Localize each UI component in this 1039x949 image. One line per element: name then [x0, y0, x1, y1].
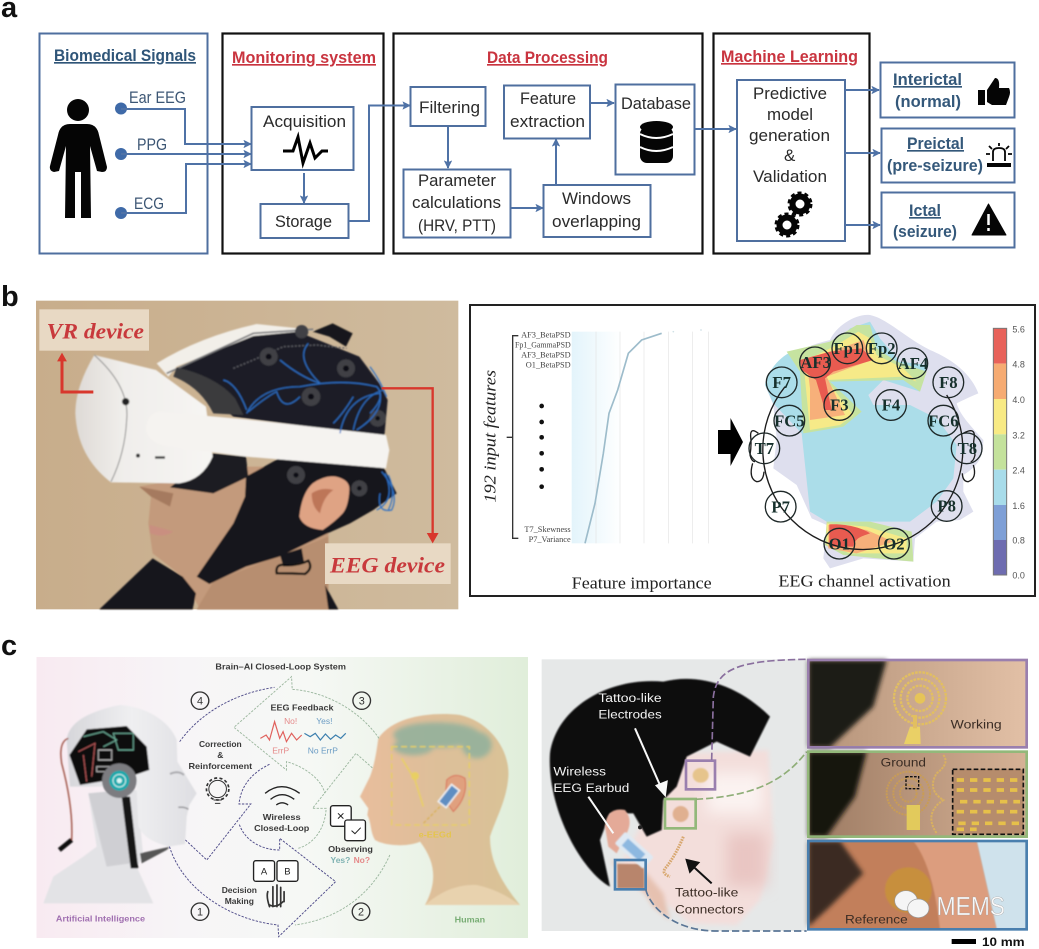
box: windows overlapping: Windows: [562, 189, 631, 208]
box: predictive model: &: [784, 146, 796, 165]
icon: warning triangle: [972, 204, 1006, 235]
color scale: 1.6: [1012, 501, 1025, 511]
output: preictal: [882, 128, 1014, 182]
label: tattoo-like connectors: Tattoo-like: [675, 886, 739, 900]
chart: feature importance: [481, 329, 712, 593]
block: EEG feedback: Yes!: [316, 716, 332, 726]
panel label c: c: [1, 630, 17, 662]
step number labels: 1: [197, 907, 203, 919]
block: observing: [328, 806, 373, 865]
panel: data processing: [394, 34, 702, 254]
feature labels: AF3_BetaPSD: [521, 350, 571, 359]
y axis title: 192 input features: [481, 370, 500, 503]
block: correction and reinforcement: [188, 739, 252, 803]
color scale: 4.8: [1012, 360, 1025, 370]
heading: monitoring system: Monitoring system: [232, 49, 376, 67]
panel: machine learning: [714, 34, 870, 254]
box: parameter calculations: (HRV, PTT): [418, 216, 496, 235]
box: storage: [260, 204, 348, 238]
icon: person: [50, 99, 107, 218]
block: EEG feedback: No!: [284, 716, 297, 726]
electrode names: F4: [882, 396, 901, 415]
marker: working electrode box: [686, 761, 715, 789]
head outline: [750, 387, 975, 549]
box: parameter calculations: calculations: [412, 193, 501, 212]
label: EEG device: [325, 543, 451, 584]
feature labels: Fp1_GammaPSD: [515, 341, 571, 350]
box: filtering: Filtering: [419, 98, 480, 117]
block: observing: No?: [354, 855, 370, 865]
arrow: black right arrow: [718, 418, 743, 466]
panel: biomedical signals: [40, 34, 208, 254]
panel frame: feature importance and EEG channel activation: [470, 305, 1035, 596]
label: tattoo-like electrodes: Electrodes: [598, 708, 662, 722]
electrode names: FC5: [774, 411, 805, 430]
panel label b: b: [1, 281, 19, 313]
scale bar: 10 mm: [982, 935, 1025, 949]
inset: ground electrode: [808, 752, 1027, 837]
dashed connectors: [646, 659, 807, 931]
step numbers: [191, 692, 371, 920]
label: artificial intelligence: Artificial Intelligence: [56, 913, 145, 923]
output: interictal: [880, 62, 1014, 118]
icon: database: [640, 121, 673, 163]
color scale: [993, 325, 1025, 580]
signal labels: ECG: [134, 194, 164, 213]
output: ictal: [882, 192, 1014, 248]
label: wireless EEG earbud: Wireless: [553, 764, 606, 778]
electrode names: F7: [772, 373, 791, 392]
box: predictive model: generation: [749, 126, 830, 145]
box: database: Database: [621, 94, 691, 113]
electrode names: Fp2: [868, 339, 896, 358]
electrode names: [755, 339, 977, 553]
electrode names: T8: [958, 439, 977, 458]
connector arrows: [121, 90, 880, 225]
color scale: 0.8: [1012, 536, 1025, 546]
heading: biomedical signals: Biomedical Signals: [54, 47, 196, 65]
icon: chat bubbles watermark: [895, 891, 929, 918]
box: predictive model: Predictive: [753, 84, 827, 103]
output: preictal: Preictal: [907, 135, 964, 153]
box: windows overlapping: overlapping: [552, 212, 641, 231]
icon: hand: [267, 885, 284, 907]
color scale: 0.0: [1012, 570, 1025, 580]
label: e-EEGd: e-EEGd: [419, 829, 452, 839]
inset: working electrode: Working: [951, 718, 1002, 732]
ellipsis dots: [539, 404, 544, 489]
electrode names: F3: [830, 396, 849, 415]
title: Brain–AI Closed-Loop System: [215, 662, 346, 672]
heading: machine learning: Machine Learning: [721, 48, 858, 66]
photo: VR and EEG headset: [36, 301, 458, 609]
label: tattoo-like connectors: [675, 886, 744, 916]
panel a: seizure prediction pipeline: [40, 34, 1014, 254]
watermark: MEMS: MEMS: [937, 891, 1005, 921]
block: decision making: B: [284, 865, 291, 876]
box: feature extraction: Feature: [520, 89, 576, 108]
feature labels: T7_Skewness: [524, 525, 571, 534]
block: EEG feedback: No ErrP: [308, 746, 338, 756]
box: database: [616, 84, 694, 174]
step number labels: [197, 696, 365, 919]
label: tattoo-like electrodes: [598, 691, 662, 722]
illustration: human head: [360, 714, 520, 905]
box: parameter calculations: Parameter: [418, 171, 496, 190]
color scale: 5.6: [1012, 325, 1025, 335]
output: preictal: (pre-seizure): [887, 157, 983, 175]
color scale: 4.0: [1012, 395, 1025, 405]
step number labels: 3: [359, 696, 365, 708]
block: EEG feedback: [260, 703, 346, 756]
electrode names: O1: [829, 534, 850, 553]
feature labels: AF3_BetaPSD: [521, 331, 571, 340]
box: storage: Storage: [275, 212, 332, 231]
box: parameter calculations: [404, 170, 510, 238]
heading: data processing: Data Processing: [487, 49, 608, 67]
box: predictive model: Validation: [753, 167, 827, 186]
block: wireless closed-loop: Wireless: [263, 812, 301, 822]
block: decision making: Making: [225, 896, 254, 906]
marker: ground electrode box: [665, 799, 696, 828]
electrode names: O2: [883, 534, 905, 553]
step number labels: 4: [197, 696, 203, 708]
electrode names: P8: [937, 497, 956, 516]
block: wireless closed-loop: [254, 787, 309, 833]
box: acquisition: [252, 107, 354, 170]
panel c left background: [36, 657, 528, 938]
photo: head with electrodes: [550, 679, 773, 925]
label: wireless EEG earbud: [553, 764, 629, 795]
block: observing: Observing: [328, 844, 373, 854]
marker: reference electrode box: [615, 860, 646, 889]
feature labels: O1_BetaPSD: [526, 361, 571, 370]
label: tattoo-like connectors: Connectors: [675, 902, 744, 916]
block: decision making: Decision: [222, 885, 257, 895]
label: VR device: VR device: [47, 318, 144, 343]
signal labels: [129, 88, 186, 213]
electrode names: F8: [939, 373, 958, 392]
label: wireless EEG earbud: EEG Earbud: [553, 781, 629, 795]
signal labels: PPG: [137, 135, 167, 154]
box: predictive model: [737, 80, 845, 241]
box: feature extraction: [504, 86, 590, 138]
chart: EEG topographic map: [749, 315, 1025, 591]
scale bar: [952, 935, 1025, 949]
inset: reference electrode: [808, 841, 1027, 929]
box: feature extraction: extraction: [510, 112, 585, 131]
panel c left: closed-loop diagram: [56, 662, 485, 937]
block: correction and reinforcement: &: [217, 750, 223, 760]
output: ictal: (seizure): [893, 223, 957, 241]
signal labels: Ear EEG: [129, 88, 186, 107]
feature labels: P7_Variance: [529, 535, 571, 544]
electrode names: FC6: [928, 411, 959, 430]
block: correction and reinforcement: Reinforcement: [188, 761, 252, 771]
electrode names: AF4: [898, 354, 929, 373]
block: wireless closed-loop: Closed-Loop: [254, 823, 309, 833]
arrow: to EEG device label: [382, 388, 438, 543]
block: decision making: A: [261, 865, 268, 876]
panel c right: wireless EEG earbud photo and insets: [542, 659, 1027, 949]
electrode names: P7: [771, 497, 790, 516]
electrode names: T7: [755, 439, 774, 458]
label: EEG device: EEG device: [329, 553, 445, 578]
block: correction and reinforcement: Correction: [199, 739, 242, 749]
output: interictal: (normal): [895, 93, 961, 111]
illustration: robot head: [43, 705, 197, 903]
block: decision making: [222, 861, 298, 907]
label: VR device: [39, 309, 149, 351]
icon: gear lightbulb: [206, 778, 229, 803]
output: ictal: Ictal: [909, 202, 941, 220]
icon: thumbs up: [978, 78, 1010, 105]
box: windows overlapping: [544, 185, 650, 237]
output: interictal: Interictal: [893, 71, 962, 89]
panel: monitoring system: [222, 34, 384, 254]
x axis title: Feature importance: [572, 574, 712, 593]
icon: alarm light: [986, 143, 1012, 165]
block: EEG feedback: ErrP: [272, 746, 290, 756]
sensor dots: [115, 102, 127, 219]
label: tattoo-like electrodes: Tattoo-like: [598, 691, 662, 705]
icon: gears: [776, 193, 811, 236]
step number labels: 2: [358, 907, 364, 919]
box: filtering: [410, 87, 486, 126]
chart title: EEG channel activation: [778, 572, 951, 591]
label: human: Human: [455, 915, 485, 925]
box: acquisition: Acquisition: [263, 112, 346, 131]
arrows: callouts: [588, 728, 712, 883]
color scale: 2.4: [1012, 465, 1025, 475]
electrode names: AF3: [800, 353, 831, 372]
arrow: to VR device label: [58, 353, 93, 392]
box: predictive model: model: [767, 105, 813, 124]
feature labels: [515, 331, 571, 544]
electrode circles: [749, 333, 982, 559]
closed-loop dashed arrows: [170, 677, 390, 937]
inset: ground electrode: Ground: [881, 756, 926, 770]
inset: reference electrode: Reference: [845, 912, 908, 926]
color scale: 3.2: [1012, 430, 1025, 440]
electrode names: Fp1: [833, 339, 861, 358]
block: EEG feedback: EEG Feedback: [271, 703, 334, 713]
block: observing: Yes?: [331, 855, 350, 865]
inset: working electrode: [808, 660, 1027, 747]
